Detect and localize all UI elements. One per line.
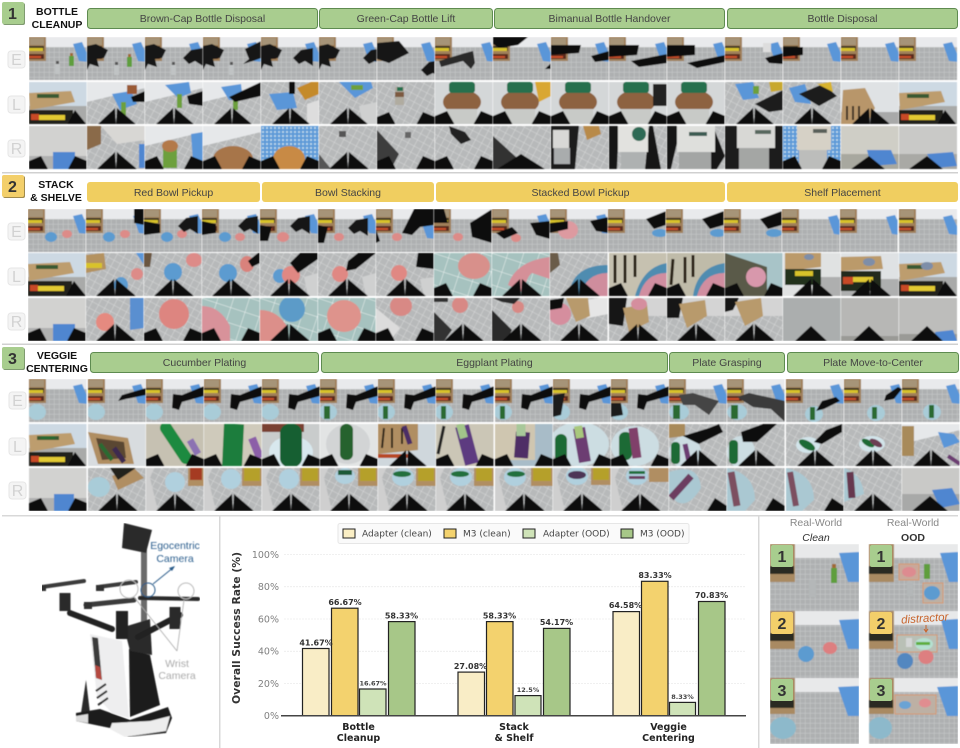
subtask bar: stack and shelve phases: Shelf Placement: [804, 187, 881, 199]
bars: stack and shelf: 58.33%: [483, 612, 516, 620]
task title: bottle cleanup: CLEANUP: [32, 19, 82, 31]
subtask bar: bottle cleanup phases: [88, 8, 958, 28]
callout: egocentric camera: [141, 540, 200, 597]
number badges: OOD: 3: [877, 683, 886, 700]
task title: bottle cleanup: BOTTLE: [36, 6, 78, 18]
callout: wrist camera: [120, 580, 196, 682]
badge 3: [2, 347, 25, 370]
heading: real-world OOD: Real-World: [887, 517, 939, 529]
legend: [338, 524, 689, 544]
divider: [2, 515, 958, 516]
badge 3: 3: [8, 351, 17, 368]
bars: veggie centering: 8.33%: [671, 693, 694, 701]
frame strip: stack and shelve camera views: [28, 209, 958, 341]
callout: wrist camera: Camera: [158, 670, 196, 682]
bars: bottle cleanup: 41.67%: [299, 638, 333, 648]
badge 2: 2: [8, 179, 17, 196]
callout: distractor: distractor: [901, 611, 950, 627]
subtask bar: veggie centering phases: [90, 352, 958, 372]
subtask bar: stack and shelve phases: Red Bowl Pickup: [134, 187, 213, 199]
photos: OOD scenes: [868, 544, 958, 744]
bars: bottle cleanup: 58.33%: [385, 612, 418, 620]
icon: robot arms: [42, 581, 198, 639]
row labels E L R: E: [11, 224, 22, 241]
badge 1: 1: [8, 6, 17, 23]
task title: stack and shelve: STACK: [38, 179, 74, 191]
bars: veggie centering: 83.33%: [638, 571, 672, 580]
number badges: clean: 3: [778, 683, 787, 700]
row labels E L R: [9, 392, 26, 500]
number badges: clean: [771, 545, 793, 701]
row labels E L R: R: [12, 483, 23, 500]
robot illustration: [42, 523, 200, 737]
subtask bar: bottle cleanup phases: Brown-Cap Bottle Disposal: [140, 13, 265, 25]
x axis and labels: Centering: [642, 733, 695, 744]
number badges: clean: 1: [778, 549, 787, 566]
panel: task 3 veggie centering: [2, 347, 960, 511]
bar chart: overall success rate: [230, 524, 746, 744]
legend: M3 (OOD): [640, 530, 684, 540]
y axis: 100%: [252, 550, 279, 561]
subtask bar: veggie centering phases: Plate Move-to-Center: [823, 357, 923, 369]
legend: Adapter (clean): [362, 530, 432, 540]
y axis: 40%: [258, 646, 279, 658]
row labels E L R: L: [12, 269, 21, 286]
bars: bottle cleanup: [299, 598, 418, 716]
subtask bar: stack and shelve phases: Stacked Bowl Pickup: [531, 187, 630, 199]
badge 1: [2, 2, 25, 25]
photos: clean scenes: [770, 544, 859, 744]
heading: real-world OOD: OOD: [901, 532, 925, 544]
number badges: OOD: [870, 545, 892, 701]
y axis: [230, 550, 746, 722]
subtask bar: veggie centering phases: Eggplant Plating: [456, 357, 533, 369]
row labels E L R: L: [13, 439, 22, 456]
divider: [2, 344, 958, 345]
x axis and labels: Veggie: [650, 722, 687, 733]
bars: bottle cleanup: 66.67%: [328, 598, 362, 607]
subtask bar: bottle cleanup phases: Green-Cap Bottle Lift: [357, 13, 455, 25]
subtask bar: veggie centering phases: Plate Grasping: [692, 357, 762, 369]
panel: task 1 bottle cleanup: [2, 2, 958, 172]
x axis and labels: [281, 715, 746, 744]
y axis: Overall Success Rate (%): [230, 552, 243, 704]
subtask bar: veggie centering phases: Cucumber Plating: [163, 357, 246, 369]
panel: task 2 stack and shelve: [2, 175, 958, 341]
number badges: clean: 2: [778, 616, 787, 633]
number badges: OOD: 2: [877, 616, 886, 633]
number badges: OOD: 1: [877, 549, 886, 566]
frame strip: veggie centering camera views: [28, 379, 960, 511]
heading: real-world clean: Real-World: [790, 517, 842, 529]
y axis: 0%: [264, 711, 279, 722]
callout: wrist camera: Wrist: [165, 658, 189, 670]
bars: stack and shelf: 54.17%: [540, 618, 573, 627]
task title: stack and shelve: & SHELVE: [30, 192, 82, 204]
heading: real-world clean: Clean: [802, 532, 830, 544]
divider: [2, 172, 958, 174]
row labels E L R: [8, 223, 25, 331]
task title: veggie centering: CENTERING: [26, 363, 88, 375]
x axis and labels: & Shelf: [494, 733, 534, 744]
icon: monitor and pole: [122, 523, 152, 622]
x axis and labels: Cleanup: [337, 733, 380, 744]
bars: bottle cleanup: 16.67%: [359, 680, 387, 688]
subtask bar: stack and shelve phases: Bowl Stacking: [315, 187, 381, 199]
legend: M3 (clean): [463, 530, 511, 540]
bars: veggie centering: [609, 571, 728, 716]
bars: veggie centering: 64.58%: [609, 601, 642, 610]
bars: stack and shelf: 12.5%: [517, 686, 540, 694]
y axis: 20%: [258, 679, 279, 690]
row labels E L R: L: [12, 97, 21, 114]
row labels E L R: R: [11, 314, 22, 331]
subtask bar: stack and shelve phases: [87, 182, 958, 202]
subtask bar: bottle cleanup phases: Bimanual Bottle Handover: [548, 13, 671, 25]
callout: egocentric camera: Camera: [156, 553, 194, 565]
task title: veggie centering: VEGGIE: [37, 350, 77, 362]
bars: veggie centering: 70.83%: [695, 591, 728, 600]
y axis: 80%: [258, 582, 279, 593]
row labels E L R: R: [11, 141, 22, 158]
bars: stack and shelf: [454, 612, 573, 716]
y axis: 60%: [258, 614, 279, 626]
row labels E L R: E: [12, 393, 23, 410]
icon: robot body: [76, 619, 172, 737]
row labels E L R: [8, 51, 25, 158]
bars: stack and shelf: 27.08%: [454, 662, 487, 671]
legend: Adapter (OOD): [543, 530, 610, 540]
x axis and labels: Stack: [499, 722, 529, 733]
row labels E L R: E: [11, 52, 22, 69]
callout: egocentric camera: Egocentric: [150, 540, 200, 552]
frame strip: bottle cleanup camera views: [29, 37, 958, 172]
subtask bar: bottle cleanup phases: Bottle Disposal: [807, 13, 878, 25]
panel: real-world clean: [770, 517, 859, 744]
x axis and labels: Bottle: [342, 722, 375, 733]
badge 2: [2, 175, 25, 198]
panel: real-world OOD: [868, 517, 958, 744]
